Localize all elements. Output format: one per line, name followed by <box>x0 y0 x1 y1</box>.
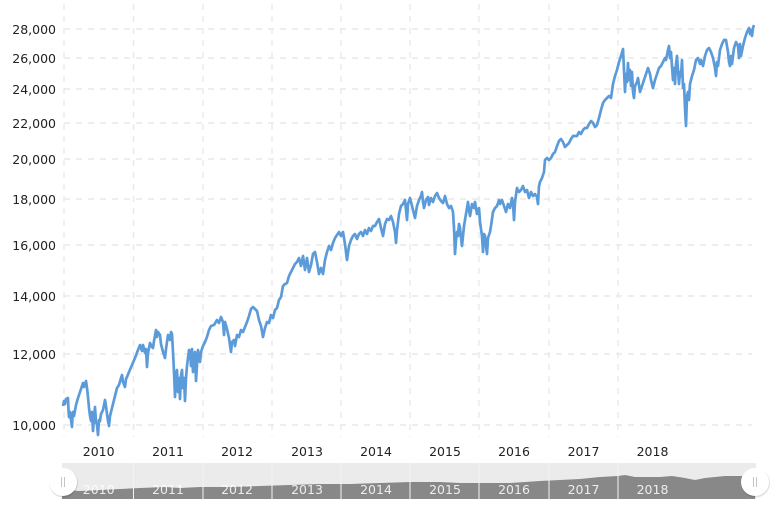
y axis labels <box>12 22 56 433</box>
y axis labels: 12,000 <box>12 347 56 362</box>
navigator year labels: 2017 <box>568 482 599 497</box>
navigator year labels: 2016 <box>498 482 530 497</box>
navigator background <box>62 463 756 499</box>
x axis year labels: 2017 <box>568 444 599 459</box>
x axis year labels: 2010 <box>83 444 115 459</box>
left range handle <box>49 468 78 498</box>
y axis labels: 28,000 <box>12 22 56 37</box>
x axis year labels: 2013 <box>291 444 323 459</box>
y axis labels: 20,000 <box>12 152 56 167</box>
y axis labels: 26,000 <box>12 51 56 66</box>
navigator year labels: 2010 <box>83 482 115 497</box>
navigator year labels: 2011 <box>152 482 184 497</box>
y axis labels: 22,000 <box>12 116 56 131</box>
right range handle <box>741 468 770 498</box>
x axis year labels: 2012 <box>221 444 253 459</box>
x axis year labels <box>83 444 668 459</box>
x axis year labels: 2014 <box>360 444 392 459</box>
navigator year labels: 2012 <box>221 482 253 497</box>
y axis labels: 18,000 <box>12 192 56 207</box>
range navigator <box>49 463 770 499</box>
navigator year labels: 2018 <box>637 482 668 497</box>
x axis year labels: 2018 <box>637 444 668 459</box>
navigator year labels: 2014 <box>360 482 392 497</box>
y axis labels: 14,000 <box>12 289 56 304</box>
y axis labels: 10,000 <box>12 418 56 433</box>
navigator year labels: 2013 <box>291 482 323 497</box>
y axis labels: 24,000 <box>12 82 56 97</box>
x axis year labels: 2016 <box>498 444 530 459</box>
navigator area series <box>62 475 755 499</box>
y axis labels: 16,000 <box>12 238 56 253</box>
navigator year labels <box>83 482 668 497</box>
index price line <box>63 25 754 435</box>
x axis year labels: 2015 <box>429 444 461 459</box>
navigator year labels: 2015 <box>429 482 461 497</box>
x axis year labels: 2011 <box>152 444 184 459</box>
